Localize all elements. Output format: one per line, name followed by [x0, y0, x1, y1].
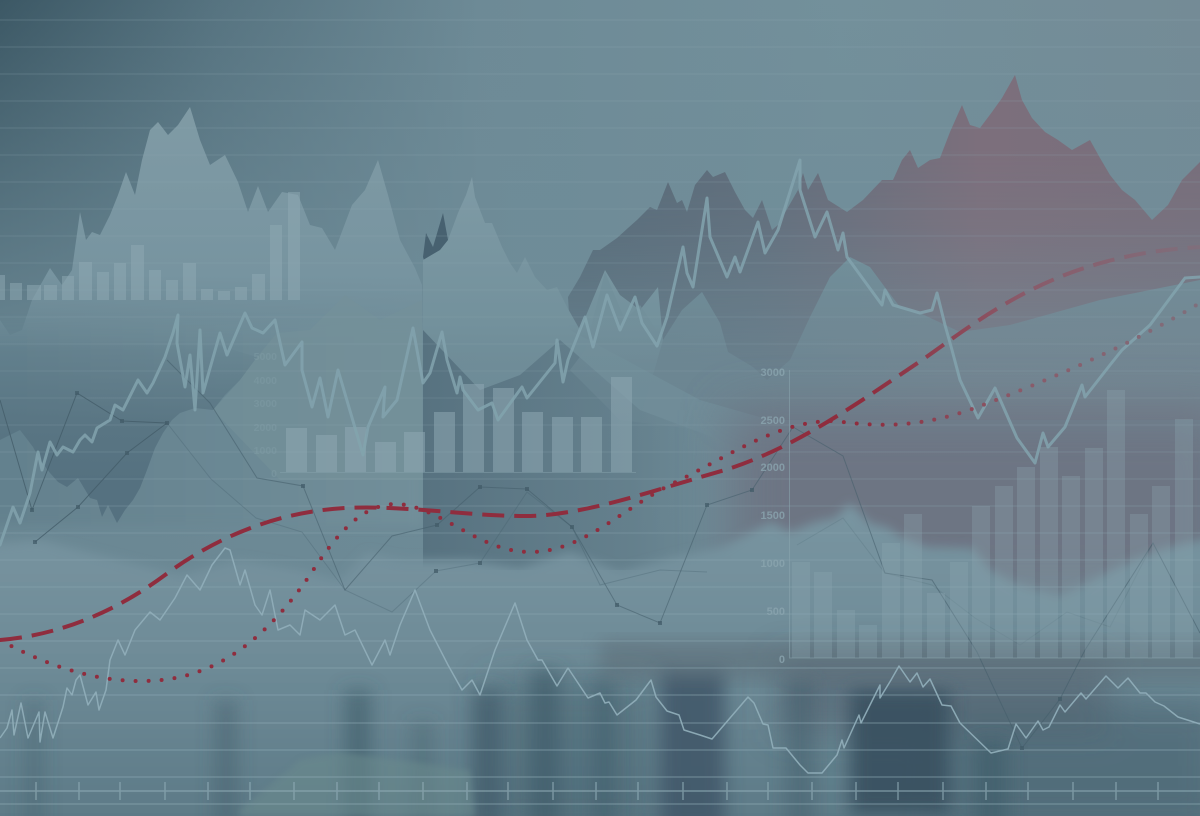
bottom axis with ticks [0, 782, 1200, 800]
left chart base panel [0, 325, 423, 525]
markers [30, 391, 1062, 750]
trend line: red dashed [0, 247, 1200, 640]
lighter mountain behind left chart [213, 295, 423, 480]
axis labels: right chart [761, 367, 785, 666]
light mountain left [0, 107, 423, 350]
dark red mountain area chart [568, 75, 1200, 380]
dark sliver of mid mountain [423, 213, 448, 288]
panel: middle chart dark backdrop [423, 330, 656, 568]
axis labels: middle chart: 5000 [254, 351, 277, 363]
axis labels: right chart: 1000 [761, 558, 785, 570]
axis labels: right chart: 0 [779, 654, 785, 666]
lower fog band [0, 503, 1200, 816]
axis labels: middle chart: 4000 [254, 375, 277, 387]
line chart: dark thin series with markers [0, 360, 1200, 750]
bottom blurred vertical bars [25, 670, 1007, 816]
trend line: red dotted [0, 303, 1200, 681]
axis labels: right chart: 1500 [761, 510, 785, 522]
green patch [240, 752, 475, 816]
axis labels: right chart: 3000 [761, 367, 785, 379]
axis labels: right chart: 2000 [761, 462, 785, 474]
dark jagged area in left chart [0, 330, 257, 523]
axis labels: right chart: 2500 [761, 415, 785, 427]
line chart: thick light line [0, 160, 1200, 545]
front mountain in middle-right [570, 257, 1200, 440]
axis labels: middle chart: 3000 [254, 398, 277, 410]
axis labels: middle chart: 2000 [254, 422, 277, 434]
axis labels: middle chart [254, 351, 277, 480]
bar chart: top left [0, 192, 300, 300]
bar chart: middle [254, 351, 636, 480]
axis labels: right chart: 500 [767, 606, 785, 618]
axis labels: middle chart: 0 [271, 468, 277, 480]
line chart: thin light line [0, 548, 1200, 773]
wide bottom shading [490, 660, 1200, 816]
axis labels: middle chart: 1000 [254, 445, 277, 457]
grey haze under right chart [600, 640, 1200, 680]
grey band at right chart [730, 410, 1200, 600]
mid light mountain [423, 177, 663, 420]
bar chart: right [761, 367, 1200, 666]
